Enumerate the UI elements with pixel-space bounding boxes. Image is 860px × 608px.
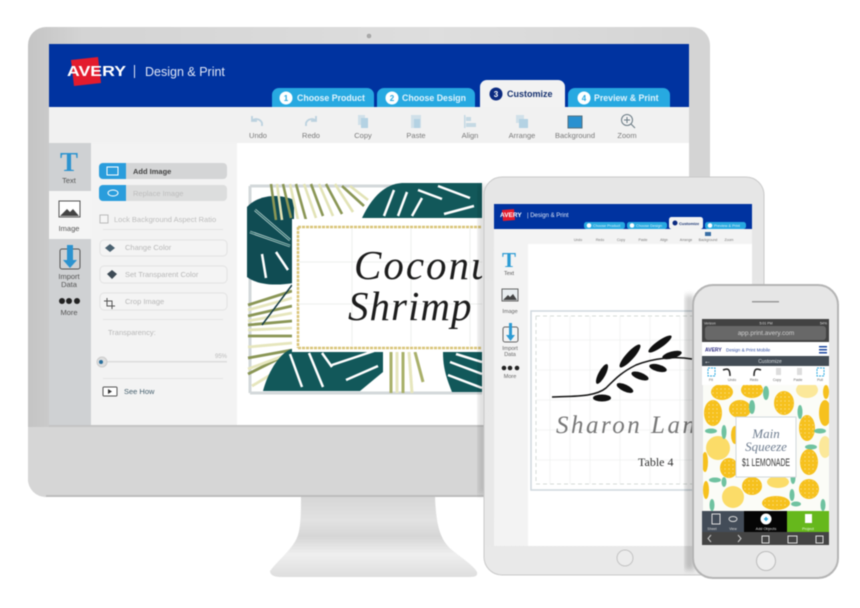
lemon panel text [742, 426, 790, 469]
lemon center panel [736, 417, 796, 477]
tablet tool rail: Import [502, 346, 518, 352]
product name: Design & Print [145, 65, 225, 79]
image tool active: Image [59, 224, 79, 233]
crop image button [100, 293, 227, 310]
tablet label: place card [530, 310, 693, 492]
import data tool: Data [61, 280, 78, 289]
transparency label: Transparency: [108, 328, 156, 337]
Avery logo [67, 57, 126, 86]
tablet header: AVERY [500, 212, 522, 219]
monitor stand [270, 496, 477, 577]
phone toolbar: Redo [750, 378, 758, 382]
tablet header: | Design & Print [527, 213, 569, 219]
see how link: See How [124, 387, 155, 396]
tablet screen [494, 204, 756, 546]
phone bottom actions: Project [802, 527, 815, 531]
tablet tool rail: Text [504, 271, 515, 277]
tablet body [484, 177, 764, 575]
monitor [28, 27, 710, 497]
align icon [464, 115, 476, 128]
dark monstera [247, 196, 294, 285]
lemon panel text: Squeeze [745, 439, 787, 454]
lemons [702, 382, 831, 510]
tablet tool rail: T [502, 248, 516, 272]
gold dashed border [298, 227, 482, 348]
left palm [248, 285, 292, 386]
crop image button: Crop Image [125, 297, 164, 306]
phone speaker [752, 301, 779, 302]
zoom icon [622, 114, 635, 128]
tablet tab 3: Customize [679, 221, 700, 226]
phone browser bar: 54% [820, 322, 827, 326]
tablet tool rail [494, 244, 528, 546]
toolbar labels: Copy [354, 131, 372, 140]
tablet toolbar: Zoom [725, 238, 734, 242]
toolbar [49, 107, 689, 143]
top palm [271, 184, 368, 220]
toolbar labels: Align [462, 131, 478, 140]
lemon panel text: $1 LEMONADE [742, 457, 790, 469]
guest name script: Sharon Lane [556, 412, 711, 439]
tablet tab 1 [584, 222, 625, 229]
toolbar labels: Zoom [617, 131, 637, 140]
leaf background [246, 181, 482, 397]
tablet toolbar: Arrange [680, 238, 692, 242]
toolbar labels: Undo [249, 131, 267, 140]
camera [367, 34, 371, 38]
tablet tab 1: Choose Product [593, 224, 621, 228]
canvas [237, 143, 689, 426]
phone body [693, 285, 838, 578]
lemon dots [705, 383, 818, 509]
phone toolbar: Fit [709, 378, 713, 382]
app header [49, 44, 689, 107]
image tool active [49, 191, 91, 239]
tablet [484, 177, 764, 575]
phone home button [756, 552, 776, 570]
copy icon [358, 115, 368, 128]
toolbar labels: Redo [302, 131, 320, 140]
tab 3 active [480, 80, 565, 107]
tab 3 active: Customize [507, 89, 553, 99]
Avery logo: AVERY [67, 63, 126, 80]
tablet toolbar: Redo [596, 238, 604, 242]
phone browser bar: app.print.avery.com [738, 330, 794, 337]
phone app header: AVERY [705, 348, 722, 354]
import data tool: Import [58, 272, 81, 281]
toolbar labels: Paste [406, 131, 426, 140]
text tool: Text [62, 176, 77, 185]
bottom center palm [391, 352, 423, 393]
undo icon [252, 116, 262, 126]
toolbar labels [249, 131, 637, 140]
replace image button: Replace Image [133, 189, 183, 198]
tab 2: 2 [390, 94, 395, 103]
lemon pattern label [702, 382, 831, 511]
tablet tab 4 [705, 222, 746, 229]
tab 2: Choose Design [402, 93, 466, 103]
paste icon [411, 115, 421, 128]
table number: Table 4 [638, 455, 673, 469]
tablet tab 4: Preview & Print [714, 224, 741, 228]
transparency slider [97, 354, 228, 367]
monitor chin [28, 427, 710, 497]
replace image button [99, 185, 227, 201]
tab 1 [272, 88, 374, 107]
phone toolbar: Paste [794, 378, 803, 382]
tablet toolbar: Copy [617, 238, 625, 242]
see how link [103, 387, 155, 396]
tablet shadow [478, 185, 487, 495]
transparent color button: Set Transparent Color [125, 270, 199, 279]
tablet tab 2 [627, 222, 667, 229]
phone app header: Design & Print Mobile [726, 348, 771, 352]
tablet tool rail: Data [504, 352, 517, 358]
phone browser bar: 5:01 PM [759, 322, 773, 326]
toolbar labels: Background [555, 131, 595, 140]
left tool rail [49, 143, 91, 426]
phone browser bar [702, 319, 829, 342]
phone customize bar: ← [704, 358, 711, 366]
tab 4: Preview & Print [594, 93, 659, 103]
phone app header [702, 342, 829, 356]
tablet toolbar: Undo [574, 238, 582, 242]
tab 4: 4 [582, 94, 587, 103]
tablet tool rail: More [504, 374, 516, 380]
phone customize bar: Customize [758, 359, 782, 365]
tablet header [494, 204, 752, 229]
import data tool [58, 245, 81, 289]
tab 2 [377, 88, 475, 107]
tablet tab 2: Choose Design [636, 224, 662, 228]
tablet tool rail: Image [502, 309, 518, 315]
change color button [100, 240, 227, 256]
transparency slider: 95% [215, 354, 228, 360]
more tool: More [60, 308, 78, 317]
white text box [291, 218, 417, 353]
phone bottom actions [702, 511, 829, 532]
phone toolbar [702, 366, 829, 385]
change color button: Change Color [125, 243, 172, 252]
phone bottom actions: Sheet [707, 527, 717, 531]
tablet tab 3 [669, 217, 703, 229]
monitor bezel [28, 27, 710, 497]
transparent color button [100, 266, 227, 283]
redo icon [306, 116, 316, 126]
tablet home button [617, 550, 633, 566]
more tool [59, 298, 80, 317]
tablet toolbar [494, 229, 752, 244]
phone toolbar: Pull [817, 378, 823, 382]
phone browser bar: Verizon [704, 322, 716, 326]
tab 4 [568, 88, 670, 107]
label script text: Coconut [354, 242, 507, 288]
label grid [298, 228, 482, 346]
phone toolbar: Copy [773, 378, 781, 382]
tab 1: Choose Product [297, 93, 365, 103]
bottom left monstera [263, 349, 383, 391]
phone browser nav [702, 532, 829, 545]
tablet toolbar: Paste [639, 238, 648, 242]
tab 1: 1 [284, 94, 289, 103]
label: coconut shrimp [246, 182, 483, 395]
arrange icon [516, 115, 528, 128]
bottom right monstera [443, 352, 482, 392]
phone [693, 285, 838, 578]
text tool: T [60, 147, 78, 177]
laurel branch [552, 333, 692, 402]
background icon [568, 116, 582, 128]
phone bottom actions: View [729, 527, 737, 531]
lemon panel text: Main [751, 426, 780, 441]
lock ratio checkbox: Lock Background Aspect Ratio [114, 215, 216, 224]
tab 3 active: 3 [494, 90, 499, 99]
tablet toolbar: Background [699, 238, 717, 242]
add image button [99, 163, 227, 179]
image options panel [91, 143, 237, 426]
phone bottom actions: Add Objects [756, 527, 776, 531]
phone toolbar: Undo [728, 378, 736, 382]
phone customize bar [702, 356, 829, 366]
top right monstera [362, 183, 482, 218]
add image button: Add Image [133, 167, 171, 176]
tablet toolbar: Align [660, 238, 668, 242]
phone shadow [685, 295, 694, 570]
label script text: Shrimp [348, 283, 472, 329]
label script text [348, 251, 483, 330]
toolbar labels: Arrange [509, 131, 535, 140]
lemon leaves [705, 386, 826, 511]
